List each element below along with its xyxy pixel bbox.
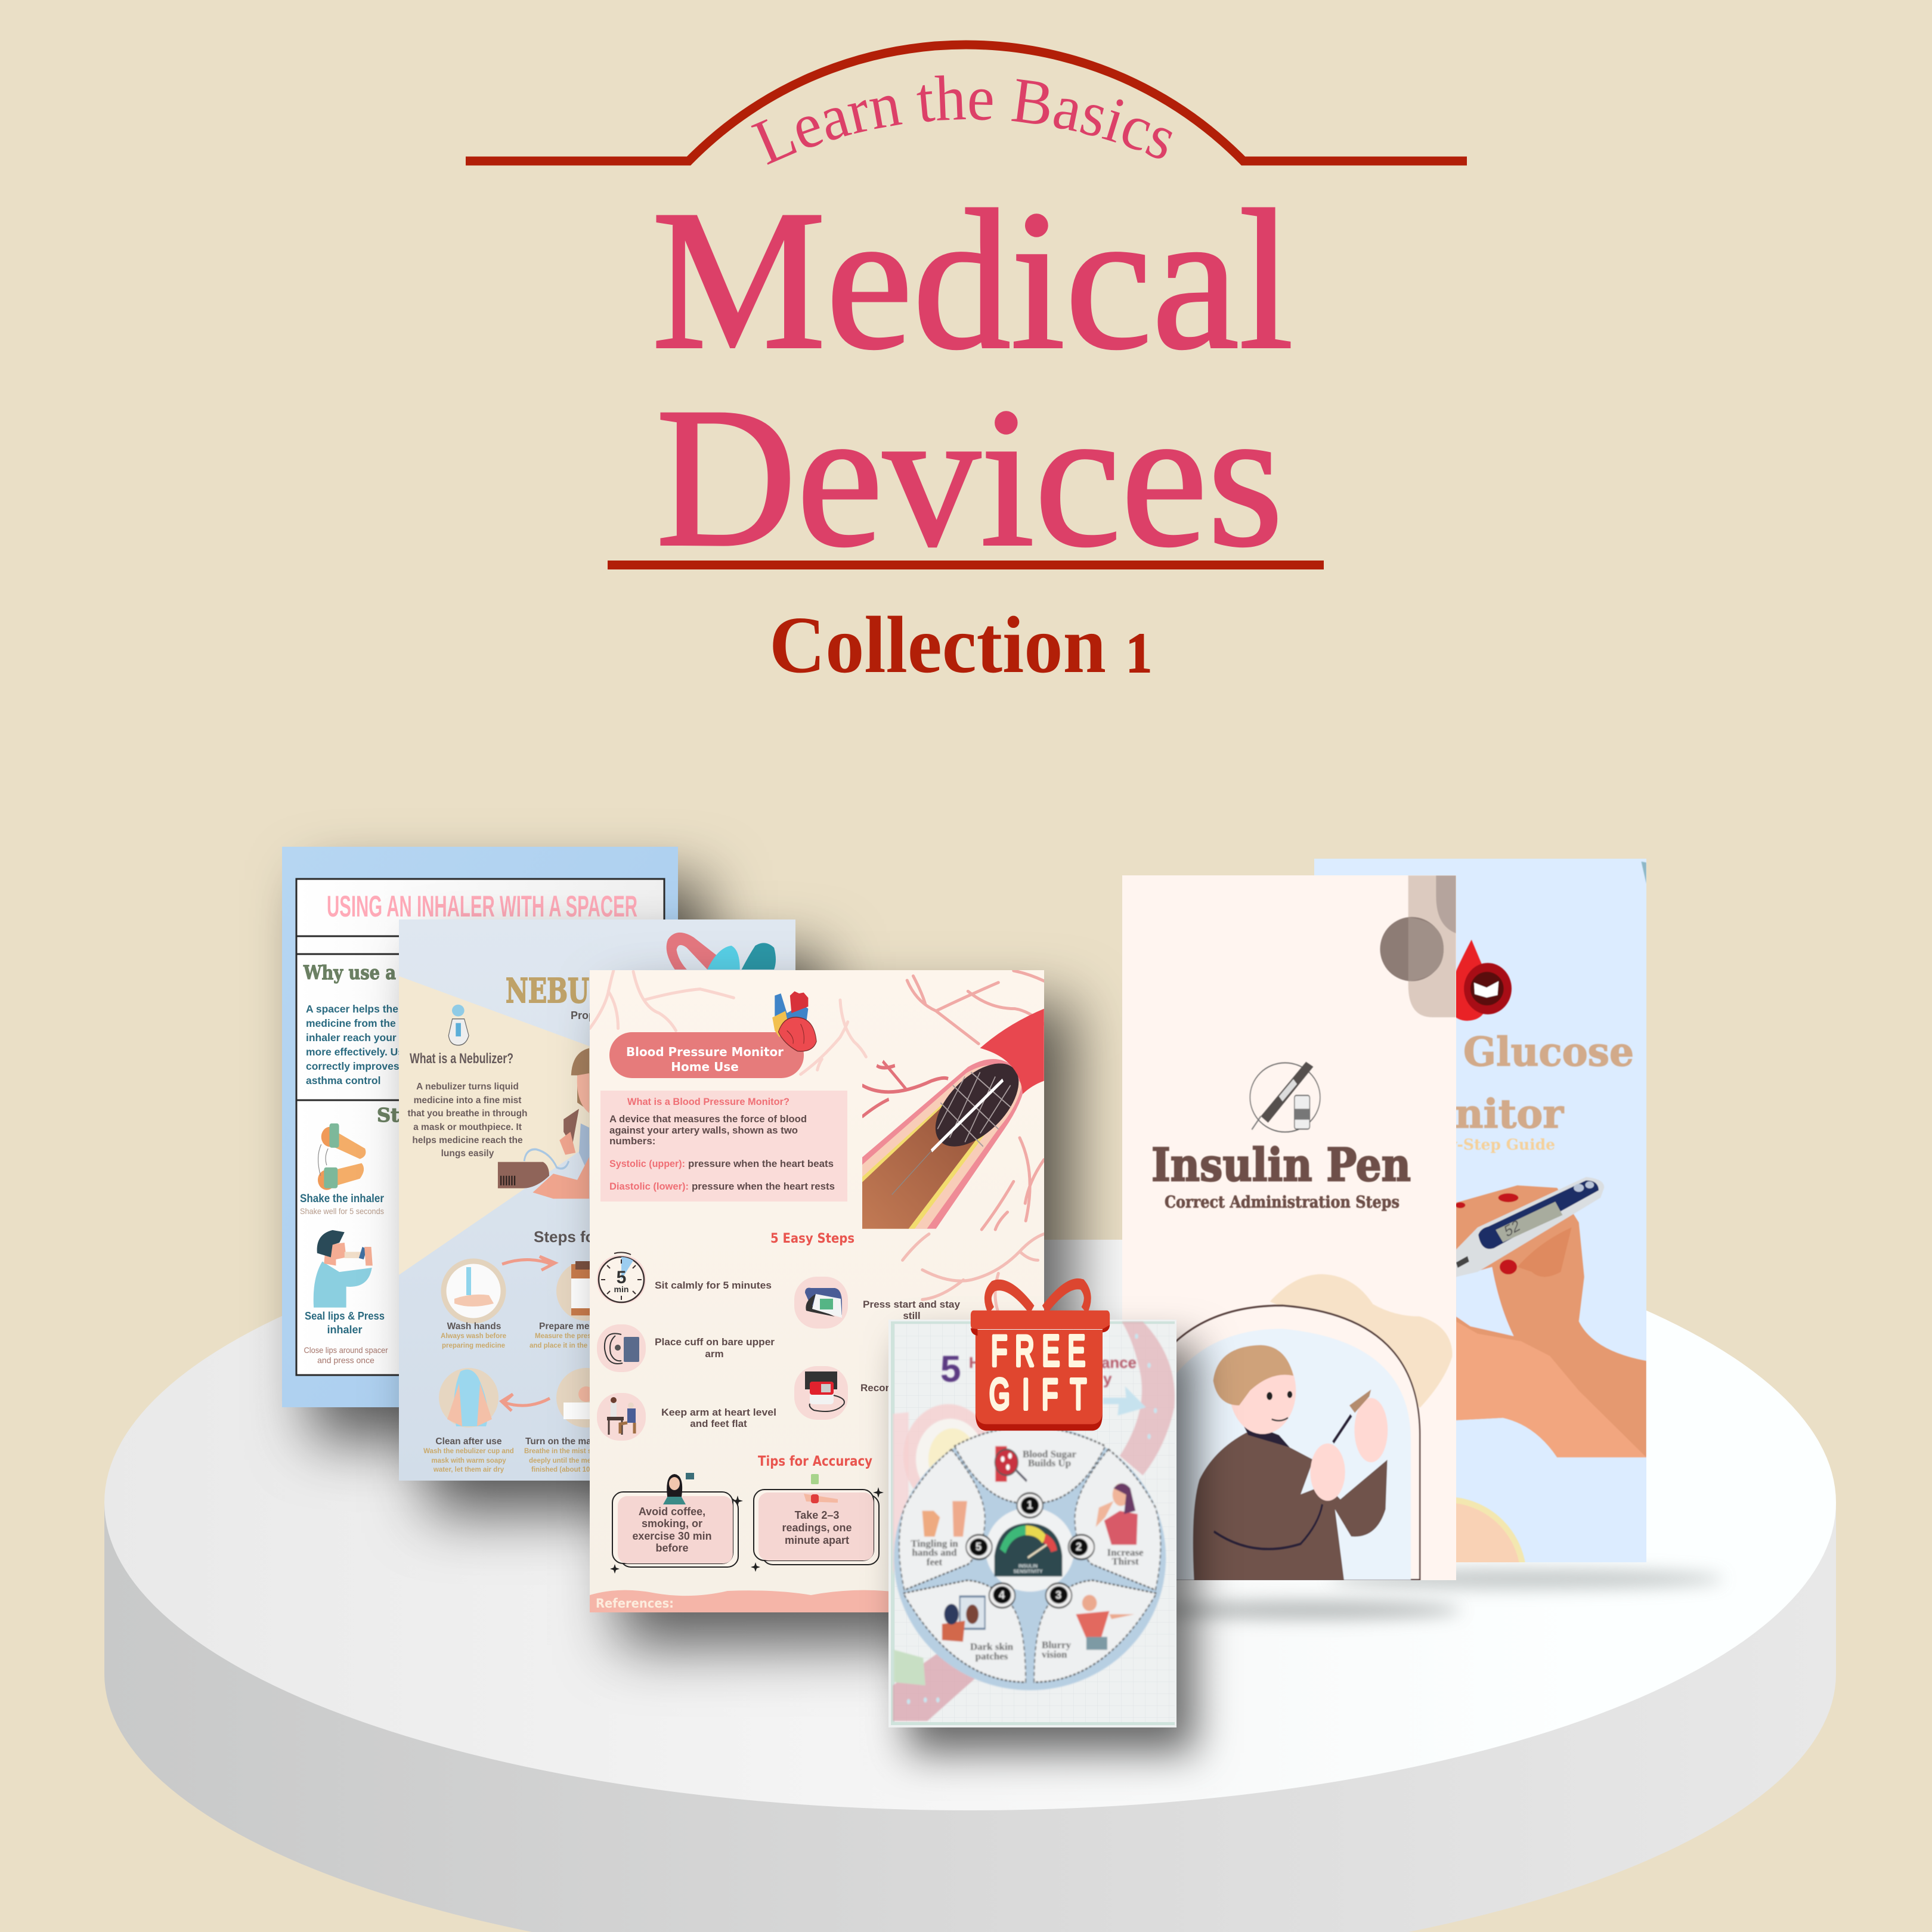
heading: 5 signs of insulin resistance fragments: ance <box>1101 1354 1137 1371</box>
text: FREE: FREE <box>991 1327 1093 1375</box>
panel: nebulizer poster <box>399 919 795 1481</box>
icon: woman drinking <box>1096 1484 1138 1545</box>
panel: free gift insulin resistance poster <box>888 1320 1176 1727</box>
subheading: correct administration steps: Correct Administration Steps <box>1165 1193 1400 1212</box>
text block: spacer description: medicine from the <box>306 1017 396 1029</box>
title: Medical: Medical <box>652 169 1293 391</box>
heading pill: Blood Pressure Monitor Home Use: Blood Pressure Monitor <box>626 1045 784 1059</box>
panel: blood pressure monitor poster <box>590 970 1045 1612</box>
tip card: avoid coffee: before <box>655 1542 689 1554</box>
decoration: pink artery bands <box>893 1322 1175 1721</box>
arrow: turn on to clean <box>501 1394 550 1411</box>
text block: shake the inhaler: Shake the inhaler <box>300 1193 385 1205</box>
icon: timer 5 min <box>597 1252 646 1304</box>
tip card: take readings: Take 2–3 <box>795 1509 839 1521</box>
illustration: hand holding glucose meter <box>1455 1177 1646 1457</box>
step text: place cuff <box>655 1336 775 1360</box>
subtitle: Collection 1: Collection <box>769 600 1106 690</box>
icon: blood pressure cuff <box>597 1324 646 1372</box>
title underline <box>608 561 1324 569</box>
text block: what is a blood pressure monitor: A device that measures the force of blood <box>609 1113 807 1125</box>
text block: nebulizer description: lungs easily <box>441 1148 494 1159</box>
illustration: artery with stent <box>862 1009 1044 1229</box>
text: GIFT: GIFT <box>989 1370 1098 1419</box>
step: wash hands <box>441 1261 506 1349</box>
chart: symptoms wheel: Dark skin <box>970 1641 1014 1652</box>
icon: ribbon and lungs <box>667 933 776 970</box>
panel: insulin pen booklet <box>1120 875 1461 1619</box>
text block: what is a blood pressure monitor <box>600 1091 847 1202</box>
tip card: avoid coffee: exercise 30 min <box>632 1530 712 1542</box>
heading: why use: Why use a <box>303 961 396 984</box>
text block: what is a blood pressure monitor: numbers: <box>609 1135 655 1147</box>
text block: what is a blood pressure monitor: Diastolic (lower): <box>609 1181 689 1192</box>
title: Devices: Devices <box>656 367 1283 588</box>
step text: place cuff: arm <box>705 1348 724 1360</box>
text block: shake the inhaler <box>300 1193 385 1216</box>
heading: 5 easy steps: 5 Easy Steps <box>770 1231 854 1246</box>
heading: tips for accuracy: Tips for Accuracy <box>758 1454 872 1469</box>
illustration: hand holding glucose meter: 52 <box>1503 1216 1522 1241</box>
icon: arm with cuff and meter <box>804 1474 838 1503</box>
text block: nebulizer description: medicine into a fine mist <box>414 1095 521 1106</box>
chart: symptoms wheel: SENSITIVITY <box>1014 1569 1043 1574</box>
chart: symptoms wheel: 4 <box>999 1589 1005 1601</box>
text block: spacer description: correctly improves <box>306 1060 400 1072</box>
decoration: taupe shapes <box>1380 875 1456 1017</box>
header arch and rules <box>466 45 1467 161</box>
arrow: wash to prepare <box>502 1256 555 1270</box>
heading: blood glucose monitor <box>1448 1029 1634 1153</box>
heading: nebulizer: NEBU <box>506 971 589 1011</box>
heading: Insulin Pen: Insulin Pen <box>1151 1138 1411 1191</box>
text block: spacer description: inhaler reach your l <box>306 1032 402 1044</box>
text block: what is a blood pressure monitor: pressure when the heart beats <box>688 1158 834 1169</box>
step text: keep arm at heart level: and feet flat <box>690 1418 747 1429</box>
icon: timer 5 min: min <box>614 1284 628 1294</box>
tip card: avoid coffee: Avoid coffee, <box>639 1506 705 1518</box>
step: clean after use: water, let them air dry <box>433 1466 504 1473</box>
step text: keep arm at heart level: Keep arm at heart level <box>661 1407 776 1418</box>
icon: timer 5 min: 5 <box>617 1268 626 1287</box>
text block: nebulizer description: that you breathe in through <box>408 1109 527 1119</box>
chart: symptoms wheel: INSULIN <box>1018 1563 1038 1569</box>
text: proper: Prop <box>571 1010 595 1021</box>
curved subtitle: Learn the Basics: Learn the Basics <box>751 75 1172 165</box>
chart: symptoms wheel: 1 <box>1027 1499 1033 1511</box>
step: prepare medicine: Measure the pres <box>535 1333 592 1340</box>
heading: steps: Ste <box>377 1104 411 1126</box>
text block: nebulizer description <box>408 1082 527 1159</box>
step text: place cuff: Place cuff on bare upper <box>655 1336 775 1348</box>
number badges <box>966 1493 1094 1608</box>
icon: blood drop with book <box>1445 862 1646 1021</box>
heading: 5 signs of insulin resistance fragments <box>940 1349 1137 1390</box>
text block: what is a blood pressure monitor: What is a Blood Pressure Monitor? <box>627 1096 789 1107</box>
step: prepare medicine: Prepare me <box>539 1321 590 1332</box>
heading: inhaler poster title: USING AN INHALER WITH A SPACER <box>327 890 637 923</box>
step text: press start: Press start and stay <box>863 1299 961 1310</box>
tip card: take readings: minute apart <box>785 1534 849 1546</box>
step: clean after use: Wash the nebulizer cup and <box>423 1448 514 1455</box>
icon: digital monitor <box>794 1277 848 1329</box>
step text: keep arm at heart level <box>661 1407 776 1429</box>
heading: what is a nebulizer: What is a Nebulizer? <box>410 1051 513 1067</box>
tip card: take readings: readings, one <box>782 1522 852 1534</box>
step: clean after use: mask with warm soapy <box>431 1457 506 1465</box>
chart: symptoms wheel: Tingling in <box>911 1538 958 1549</box>
step: turn on the machine <box>524 1368 616 1473</box>
step: clean after use <box>423 1368 514 1473</box>
step text: sit calmly: Sit calmly for 5 minutes <box>655 1280 772 1291</box>
heading: 5 signs of insulin resistance fragments: 5 <box>940 1349 961 1390</box>
icon: person using inhaler <box>314 1230 373 1308</box>
heading: 5 signs of insulin resistance fragments: y <box>1103 1370 1112 1388</box>
chart: symptoms wheel: feet <box>927 1556 943 1568</box>
icon: red monitor <box>794 1366 848 1420</box>
step text: record: Recor <box>860 1382 890 1394</box>
text block: nebulizer description: a mask or mouthpiece. It <box>413 1122 522 1132</box>
icon: insulin sensitivity gauge <box>994 1523 1063 1577</box>
text block: spacer description: A spacer helps the <box>306 1003 398 1015</box>
chart: symptoms wheel: 5 <box>976 1541 982 1553</box>
chart: symptoms wheel: Increase <box>1107 1547 1144 1558</box>
subtitle: Collection 1: 1 <box>1126 621 1152 685</box>
text block: seal lips and press: and press once <box>317 1355 374 1365</box>
icon: doctor and patient <box>597 1393 646 1441</box>
step: wash hands: preparing medicine <box>442 1342 505 1349</box>
illustration: man with insulin pen in arch <box>1120 1274 1453 1580</box>
icon: insulin pen and vial <box>1250 1062 1320 1132</box>
step text: press start <box>863 1299 961 1321</box>
step: clean after use: Clean after use <box>435 1436 502 1447</box>
heading: blood glucose monitor: Glucose <box>1463 1029 1634 1075</box>
illustration: child using nebulizer machine <box>498 1048 589 1199</box>
footer band: references: References: <box>596 1596 674 1611</box>
heading: blood glucose monitor: nitor <box>1455 1091 1564 1137</box>
icon: woman with blurry vision <box>1076 1595 1135 1650</box>
display platform <box>104 1195 1836 1932</box>
step: prepare medicine: and place it in the r <box>530 1342 592 1349</box>
chart: symptoms wheel: patches <box>976 1651 1008 1662</box>
icon: woman praying <box>663 1473 694 1504</box>
icon: heart <box>772 991 816 1051</box>
step: wash hands: Wash hands <box>447 1321 501 1332</box>
icon: woman with mirror <box>942 1596 985 1642</box>
heading: blood glucose monitor: y-Step Guide <box>1448 1136 1555 1153</box>
heading: 5 signs of insulin resistance fragments: H <box>969 1354 980 1371</box>
chart: symptoms wheel: Blurry <box>1042 1639 1072 1651</box>
step: turn on the machine: Breathe in the mist sl <box>524 1448 593 1455</box>
tip card: avoid coffee: smoking, or <box>642 1518 702 1530</box>
text block: seal lips and press <box>304 1310 388 1365</box>
icon: humidifier <box>448 1005 469 1045</box>
heading pill: Blood Pressure Monitor Home Use: Home Use <box>671 1060 739 1074</box>
step: turn on the machine: Turn on the ma <box>525 1436 592 1447</box>
chart: symptoms wheel <box>894 1425 1166 1690</box>
text block: shake the inhaler: Shake well for 5 seconds <box>300 1206 384 1216</box>
text block: spacer description <box>306 1003 404 1086</box>
text block: seal lips and press: inhaler <box>327 1324 363 1336</box>
decoration: peach circle <box>1456 1497 1525 1562</box>
text block: what is a blood pressure monitor: pressure when the heart rests <box>692 1181 835 1192</box>
step: turn on the machine: finished (about 10– <box>531 1466 594 1473</box>
text block: spacer description: more effectively. Us <box>306 1046 404 1058</box>
chart: symptoms wheel: hands and <box>912 1547 957 1558</box>
step: turn on the machine: deeply until the me <box>529 1457 591 1465</box>
text block: seal lips and press: Close lips around spacer <box>304 1345 388 1355</box>
text block: what is a blood pressure monitor: Systolic (upper): <box>609 1158 685 1169</box>
icon: blood sugar magnifier <box>995 1446 1027 1482</box>
text block: spacer description: asthma control <box>306 1075 380 1086</box>
badge: free gift box <box>971 1284 1110 1431</box>
step: prepare medicine <box>530 1261 616 1349</box>
text block: nebulizer description: helps medicine reach the <box>412 1135 523 1145</box>
icon: shaking inhaler hands <box>318 1123 366 1190</box>
panel: inhaler with spacer poster <box>282 847 678 1407</box>
step: wash hands: Always wash before <box>441 1333 506 1340</box>
heading: steps for: Steps for <box>534 1228 601 1246</box>
icon: tingling hands <box>922 1501 967 1537</box>
tip card: take readings <box>751 1487 884 1572</box>
chart: symptoms wheel: 2 <box>1076 1541 1082 1553</box>
chart: symptoms wheel: Blood Sugar <box>1023 1448 1077 1460</box>
footer band: references <box>590 1590 1044 1612</box>
chart: symptoms wheel: vision <box>1042 1649 1067 1660</box>
text block: nebulizer description: A nebulizer turns liquid <box>416 1082 519 1092</box>
chart: symptoms wheel: Thirst <box>1111 1556 1139 1567</box>
text block: seal lips and press: Seal lips & Press <box>305 1310 385 1322</box>
chart: symptoms wheel: 3 <box>1055 1589 1061 1601</box>
tip card: avoid coffee <box>610 1492 743 1574</box>
step text: press start: still <box>903 1310 921 1321</box>
heading pill: Blood Pressure Monitor Home Use <box>609 1032 804 1078</box>
chart: symptoms wheel: Builds Up <box>1028 1457 1071 1469</box>
text block: what is a blood pressure monitor: against your artery walls, shown as two <box>609 1125 798 1136</box>
panel: glucose monitor booklet <box>1314 859 1723 1655</box>
